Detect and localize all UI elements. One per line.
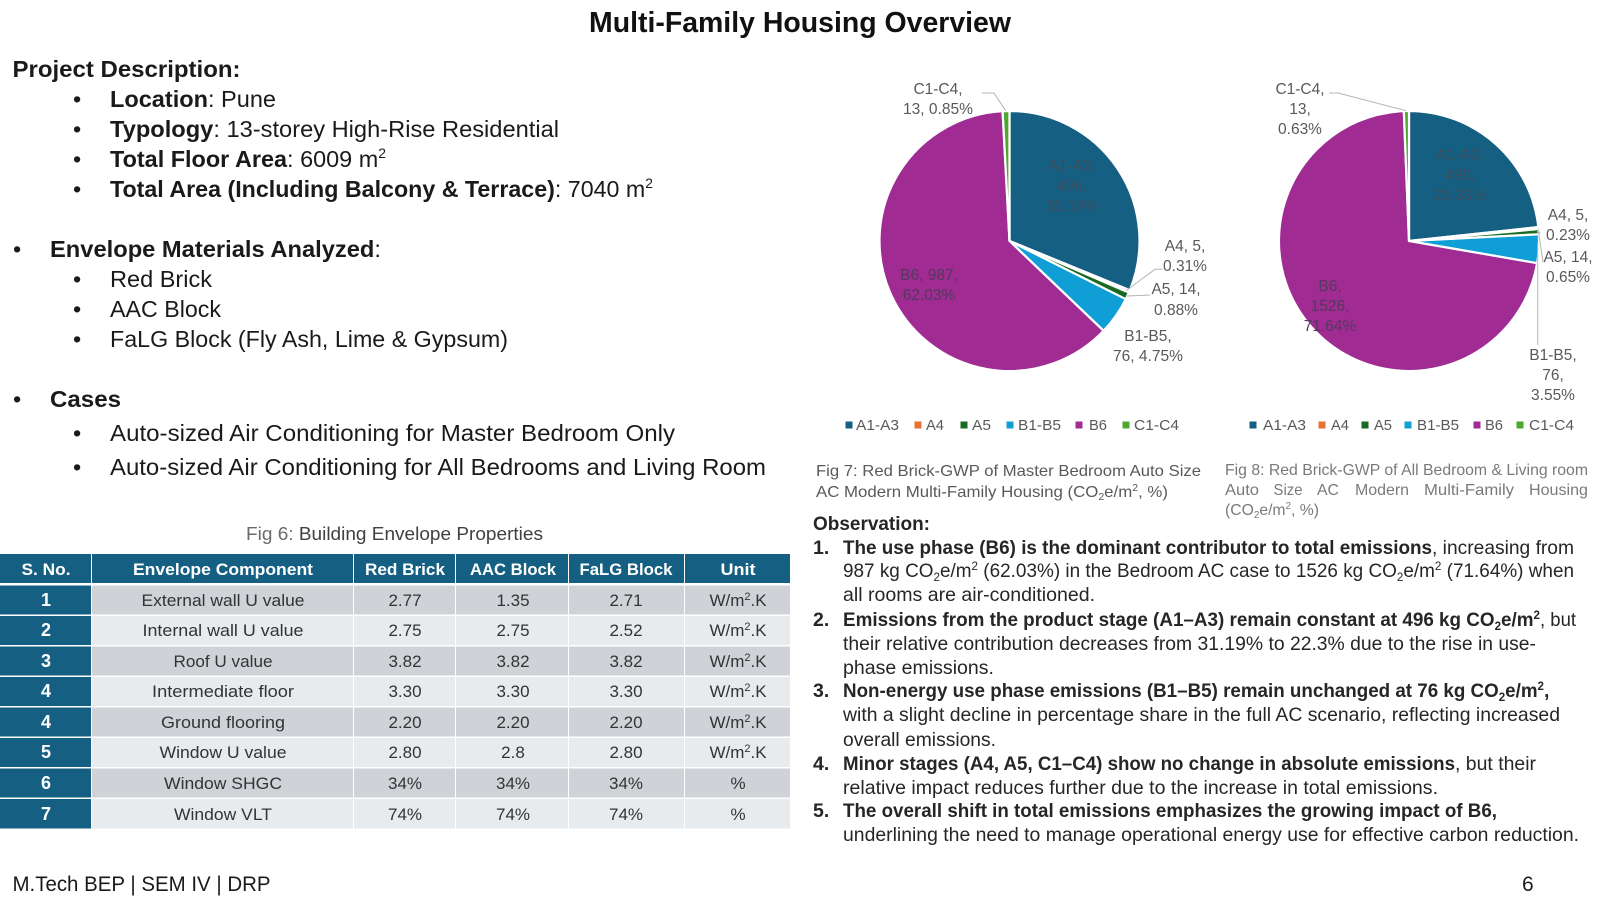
table row 4 ground flooring: 2.20	[496, 713, 530, 732]
table row 2	[0, 616, 790, 645]
table column separators	[353, 585, 685, 829]
observation 3: Non-energy use phase emissions (B1–B5) remain unchanged at 76 kg CO	[843, 680, 1524, 702]
observation 1: 2	[1397, 570, 1404, 584]
table header: Red Brick	[365, 560, 446, 579]
caption: fig 8: Auto	[1225, 482, 1259, 499]
table row 2: 2	[41, 620, 51, 640]
list: cases	[13, 386, 766, 480]
observation 3: with a slight decline in percentage share in the full AC scenario, reflecting increased	[842, 704, 1560, 726]
table row 4 intermediate floor: 3.30	[388, 682, 422, 701]
data labels: A4, 5,	[1165, 238, 1205, 255]
legend: A1-A3	[1263, 417, 1306, 434]
observation 3: ,	[1544, 680, 1549, 702]
caption: fig 8: Multi-Family	[1424, 482, 1514, 499]
observation 1: 2	[1435, 559, 1442, 573]
table row 4 ground flooring: W/m	[709, 713, 744, 732]
list: envelope materials: FaLG Block (Fly Ash, Lime & Gypsum)	[110, 326, 508, 352]
table row 5: Window U value	[160, 743, 286, 762]
list: envelope materials: •	[73, 266, 81, 292]
list: project facts: Total Floor Area: 6009 m	[110, 146, 379, 172]
data labels: 62.03%	[903, 287, 955, 304]
observation 4: relative impact reduces further due to the increase in total emissions.	[843, 777, 1438, 799]
table row 4 intermediate floor: 3.30	[609, 682, 643, 701]
table row 4 intermediate floor: W/m	[709, 682, 744, 701]
footer: course label: M.Tech BEP | SEM IV | DRP	[12, 873, 270, 896]
observation 2: their relative contribution decreases from 31.19% to 22.3% due to the rise in use-	[843, 633, 1536, 655]
data labels: A1-A3,	[1048, 158, 1096, 175]
table row 1: 1	[41, 590, 51, 610]
table row 3: 3.82	[496, 652, 530, 671]
title: Multi-Family Housing Overview	[589, 7, 1012, 39]
list: envelope materials: Envelope Materials Analyzed:	[50, 236, 381, 262]
table row 4 intermediate floor: Intermediate floor	[152, 682, 294, 701]
caption: fig 8: 2	[1286, 501, 1291, 512]
list: project facts: •	[73, 176, 81, 202]
list: project facts: •	[73, 86, 81, 112]
caption: fig 7: AC Modern Multi-Family Housing (CO	[816, 484, 1085, 501]
table row 3: 2	[744, 652, 750, 664]
observation 3: 2	[1499, 690, 1505, 704]
data labels: A5, 14,	[1543, 249, 1593, 266]
observation 1: The use phase (B6) is the dominant contributor to total emissions	[843, 537, 1432, 559]
legend: B1-B5	[1018, 417, 1061, 434]
pie slices	[879, 111, 1140, 371]
table row 3	[0, 646, 790, 676]
table row 5: 2.80	[388, 743, 422, 762]
table row 4 intermediate floor: 4	[41, 681, 51, 701]
observation 1: e/m	[940, 560, 972, 582]
observation 3	[813, 679, 1560, 751]
data labels: 76, 4.75%	[1113, 348, 1183, 365]
list: envelope materials: •	[73, 296, 81, 322]
table row 7: 74%	[609, 805, 643, 824]
legend: B6	[1485, 417, 1503, 434]
table row 3: 3	[41, 651, 51, 671]
data labels: 1526,	[1311, 298, 1349, 315]
list: envelope materials: AAC Block	[110, 296, 221, 322]
list: envelope materials: •	[13, 236, 21, 262]
table row 4 ground flooring: 2.20	[609, 713, 643, 732]
caption: fig 8: Modern	[1355, 482, 1409, 499]
table header	[0, 554, 790, 583]
table row 6: 34%	[496, 774, 530, 793]
table row 4 intermediate floor	[0, 677, 790, 706]
legend: B6	[1089, 417, 1107, 434]
data labels: B6, 987,	[900, 267, 958, 284]
table header: S. No.	[22, 560, 70, 579]
observation 2: e/m	[1501, 609, 1534, 631]
table row 5: 2	[744, 743, 750, 755]
caption: fig 7: e/m	[1104, 484, 1132, 501]
table row 7: Window VLT	[174, 805, 272, 824]
observation 1: , increasing from	[1432, 537, 1574, 559]
table row 1: 2	[744, 591, 750, 603]
observation 4: , but their	[1455, 753, 1537, 775]
table row 1: 1.35	[496, 591, 530, 610]
table row 7: %	[730, 805, 746, 824]
table row 6	[0, 768, 790, 798]
caption: fig 8: 2	[1254, 510, 1260, 521]
data labels: A4, 5,	[1548, 207, 1588, 224]
list: project facts: 2	[378, 145, 386, 161]
list: cases: Auto-sized Air Conditioning for All Bedrooms and Living Room	[110, 454, 766, 480]
caption: fig 8: Size	[1274, 482, 1303, 499]
table row 6: 34%	[609, 774, 643, 793]
data labels: 0.31%	[1163, 258, 1207, 275]
table row 5: 2.8	[501, 743, 525, 762]
table row 7: 74%	[388, 805, 422, 824]
caption: fig 7: 2	[1132, 483, 1139, 494]
panel: project description	[12, 56, 766, 480]
table row 7: 7	[41, 804, 51, 824]
table row 3: 3.82	[388, 652, 422, 671]
table row 4 ground flooring: .K	[750, 713, 767, 732]
table row 4 ground flooring: Ground flooring	[161, 713, 285, 732]
data labels: 0.88%	[1154, 302, 1198, 319]
table row 2: 2.75	[388, 621, 422, 640]
data labels: 76,	[1542, 367, 1564, 384]
table row 4 ground flooring	[0, 708, 790, 736]
pie slices	[1279, 111, 1539, 371]
table row 3: Roof U value	[174, 652, 272, 671]
legend: A4	[926, 417, 944, 434]
observation 5: 5.	[813, 800, 829, 822]
legend	[846, 417, 1179, 434]
observation 1: 1.	[813, 537, 829, 559]
caption: fig 7	[816, 463, 1201, 503]
observation 4	[813, 753, 1537, 799]
observation 2: , but	[1540, 609, 1577, 631]
table row 6: 34%	[388, 774, 422, 793]
table header: AAC Block	[470, 560, 557, 579]
data labels: B1-B5,	[1124, 328, 1172, 345]
data labels: 496,	[1057, 178, 1087, 195]
table row 1: W/m	[709, 591, 744, 610]
list: cases: •	[73, 420, 81, 446]
observation 1: 987 kg CO	[843, 560, 936, 582]
table row 2: Internal wall U value	[142, 621, 304, 640]
data labels: 0.65%	[1546, 269, 1590, 286]
data labels: B1-B5,	[1529, 347, 1577, 364]
data labels: 71.64%	[1304, 318, 1356, 335]
data labels: 31.19%	[1046, 198, 1098, 215]
observation 3: e/m	[1505, 680, 1538, 702]
table row 3: .K	[750, 652, 767, 671]
table row 4 ground flooring: 2.20	[388, 713, 422, 732]
table header: FaLG Block	[580, 560, 673, 579]
list: project facts: •	[73, 146, 81, 172]
data labels: C1-C4,	[1275, 81, 1325, 98]
data labels: A1-A3,	[1436, 147, 1484, 164]
panel: building envelope table	[0, 524, 790, 829]
list: project facts: Typology: 13-storey High-Rise Residential	[110, 116, 559, 142]
list: envelope materials: •	[73, 326, 81, 352]
observation 1: e/m	[1403, 560, 1435, 582]
data labels: A5, 14,	[1151, 281, 1201, 298]
data labels: B6,	[1318, 278, 1342, 295]
observation 1	[813, 537, 1574, 606]
table row 3: W/m	[709, 652, 744, 671]
observation 3: 3.	[813, 680, 829, 702]
panel: observations	[813, 513, 1579, 846]
table row 4 intermediate floor: .K	[750, 682, 767, 701]
table row 1: External wall U value	[142, 591, 304, 610]
observation 4: 4.	[813, 753, 829, 775]
observation 1: (71.64%) when	[1441, 560, 1574, 582]
list: cases: Auto-sized Air Conditioning for Master Bedroom Only	[110, 420, 675, 446]
list: envelope materials	[13, 236, 508, 352]
legend	[1250, 417, 1574, 434]
chart: pie fig 8	[1250, 81, 1593, 434]
legend: C1-C4	[1134, 417, 1179, 434]
list: envelope materials: Red Brick	[110, 266, 212, 292]
data labels: C1-C4,	[913, 81, 963, 98]
caption: fig 8: e/m	[1259, 502, 1286, 519]
footer: page number: 6	[1522, 873, 1534, 896]
caption: fig 8: AC	[1317, 482, 1339, 499]
table row 5: 2.80	[609, 743, 643, 762]
table header: Envelope Component	[133, 560, 313, 579]
table header: Unit	[720, 560, 756, 579]
observation 2: 2	[1534, 608, 1540, 622]
table row 5	[0, 738, 790, 767]
table row 2: .K	[750, 621, 767, 640]
observation 2: 2.	[813, 609, 829, 631]
list: project facts: Location: Pune	[110, 86, 276, 112]
caption: fig 7: 2	[1098, 492, 1105, 503]
observation 1: 2	[972, 559, 978, 573]
table row 1: .K	[750, 591, 767, 610]
observation 5	[813, 800, 1579, 846]
list: project facts: Total Area (Including Balcony & Terrace): 7040 m	[110, 176, 646, 202]
data labels: 0.23%	[1546, 227, 1590, 244]
list: cases: •	[73, 454, 81, 480]
table row 2: 2	[744, 621, 750, 633]
list: project facts: 2	[645, 175, 653, 191]
observation 5: underlining the need to manage operational energy use for effective carbon reduction.	[843, 824, 1579, 846]
table row 6: Window SHGC	[164, 774, 282, 793]
observation 2	[813, 608, 1577, 679]
observation 2: 2	[1495, 619, 1501, 633]
caption: fig 6: Fig 6: Building Envelope Properties	[246, 524, 543, 544]
list: project facts	[73, 86, 653, 202]
observation 3: 2	[1538, 679, 1544, 693]
table row 5: .K	[750, 743, 767, 762]
data labels: 13, 0.85%	[903, 101, 973, 118]
leader lines	[1329, 93, 1543, 345]
observation 1: all rooms are air-conditioned.	[843, 584, 1095, 606]
table row 2: 2.52	[609, 621, 643, 640]
caption: fig 8	[1225, 462, 1588, 521]
data labels: 23.30%	[1434, 187, 1486, 204]
legend: A5	[1374, 417, 1392, 434]
legend: C1-C4	[1529, 417, 1574, 434]
table row 4 intermediate floor: 2	[744, 682, 750, 694]
table row 3: 3.82	[609, 652, 643, 671]
data labels	[900, 81, 1207, 365]
data labels	[1275, 81, 1593, 404]
table row 2: W/m	[709, 621, 744, 640]
observation 5: The overall shift in total emissions emphasizes the growing impact of B6,	[843, 800, 1497, 822]
chart: pie fig 7	[846, 81, 1207, 434]
observation 2: Emissions from the product stage (A1–A3) remain constant at 496 kg CO	[843, 609, 1517, 631]
observation 4: Minor stages (A4, A5, C1–C4) show no change in absolute emissions	[843, 753, 1455, 775]
data labels: 0.63%	[1278, 121, 1322, 138]
caption: fig 8: , %)	[1291, 502, 1319, 519]
table row 1: 2.77	[388, 591, 422, 610]
list: project facts: •	[73, 116, 81, 142]
caption: fig 8: (CO	[1225, 502, 1254, 519]
table row 4 ground flooring: 2	[744, 713, 750, 725]
table row 5: 5	[41, 742, 51, 762]
heading: observation: Observation:	[813, 513, 930, 535]
table row 6: 6	[41, 773, 51, 793]
legend: A5	[972, 417, 991, 434]
table row 6: %	[730, 774, 746, 793]
legend: A1-A3	[856, 417, 899, 434]
data labels: 13,	[1289, 101, 1311, 118]
leader lines	[982, 93, 1163, 296]
caption: fig 7: Fig 7: Red Brick-GWP of Master Bedroom Auto Size	[816, 463, 1201, 480]
data labels: 3.55%	[1531, 387, 1575, 404]
heading: project description: Project Description:	[12, 56, 241, 82]
table row 1	[0, 586, 790, 614]
table row 1: 2.71	[609, 591, 643, 610]
list: cases: •	[13, 386, 21, 412]
observation 3: overall emissions.	[843, 729, 996, 751]
observation 1: (62.03%) in the Bedroom AC case to 1526 kg CO	[978, 560, 1397, 582]
caption: fig 8: Housing	[1529, 482, 1588, 499]
observation 1: 2	[933, 570, 940, 584]
data labels: 496,	[1445, 167, 1475, 184]
table row 7	[0, 799, 790, 828]
table row 4 ground flooring: 4	[41, 712, 51, 732]
table row 5: W/m	[709, 743, 744, 762]
table row 2: 2.75	[496, 621, 530, 640]
observation 2: phase emissions.	[843, 657, 994, 679]
legend: A4	[1331, 417, 1349, 434]
legend: B1-B5	[1417, 417, 1459, 434]
caption: fig 7: , %)	[1138, 484, 1168, 501]
list: cases: Cases	[50, 386, 121, 412]
caption: fig 8: Fig 8: Red Brick-GWP of All Bedroom & Living room	[1225, 462, 1588, 479]
table row 7: 74%	[496, 805, 530, 824]
table row 4 intermediate floor: 3.30	[496, 682, 530, 701]
